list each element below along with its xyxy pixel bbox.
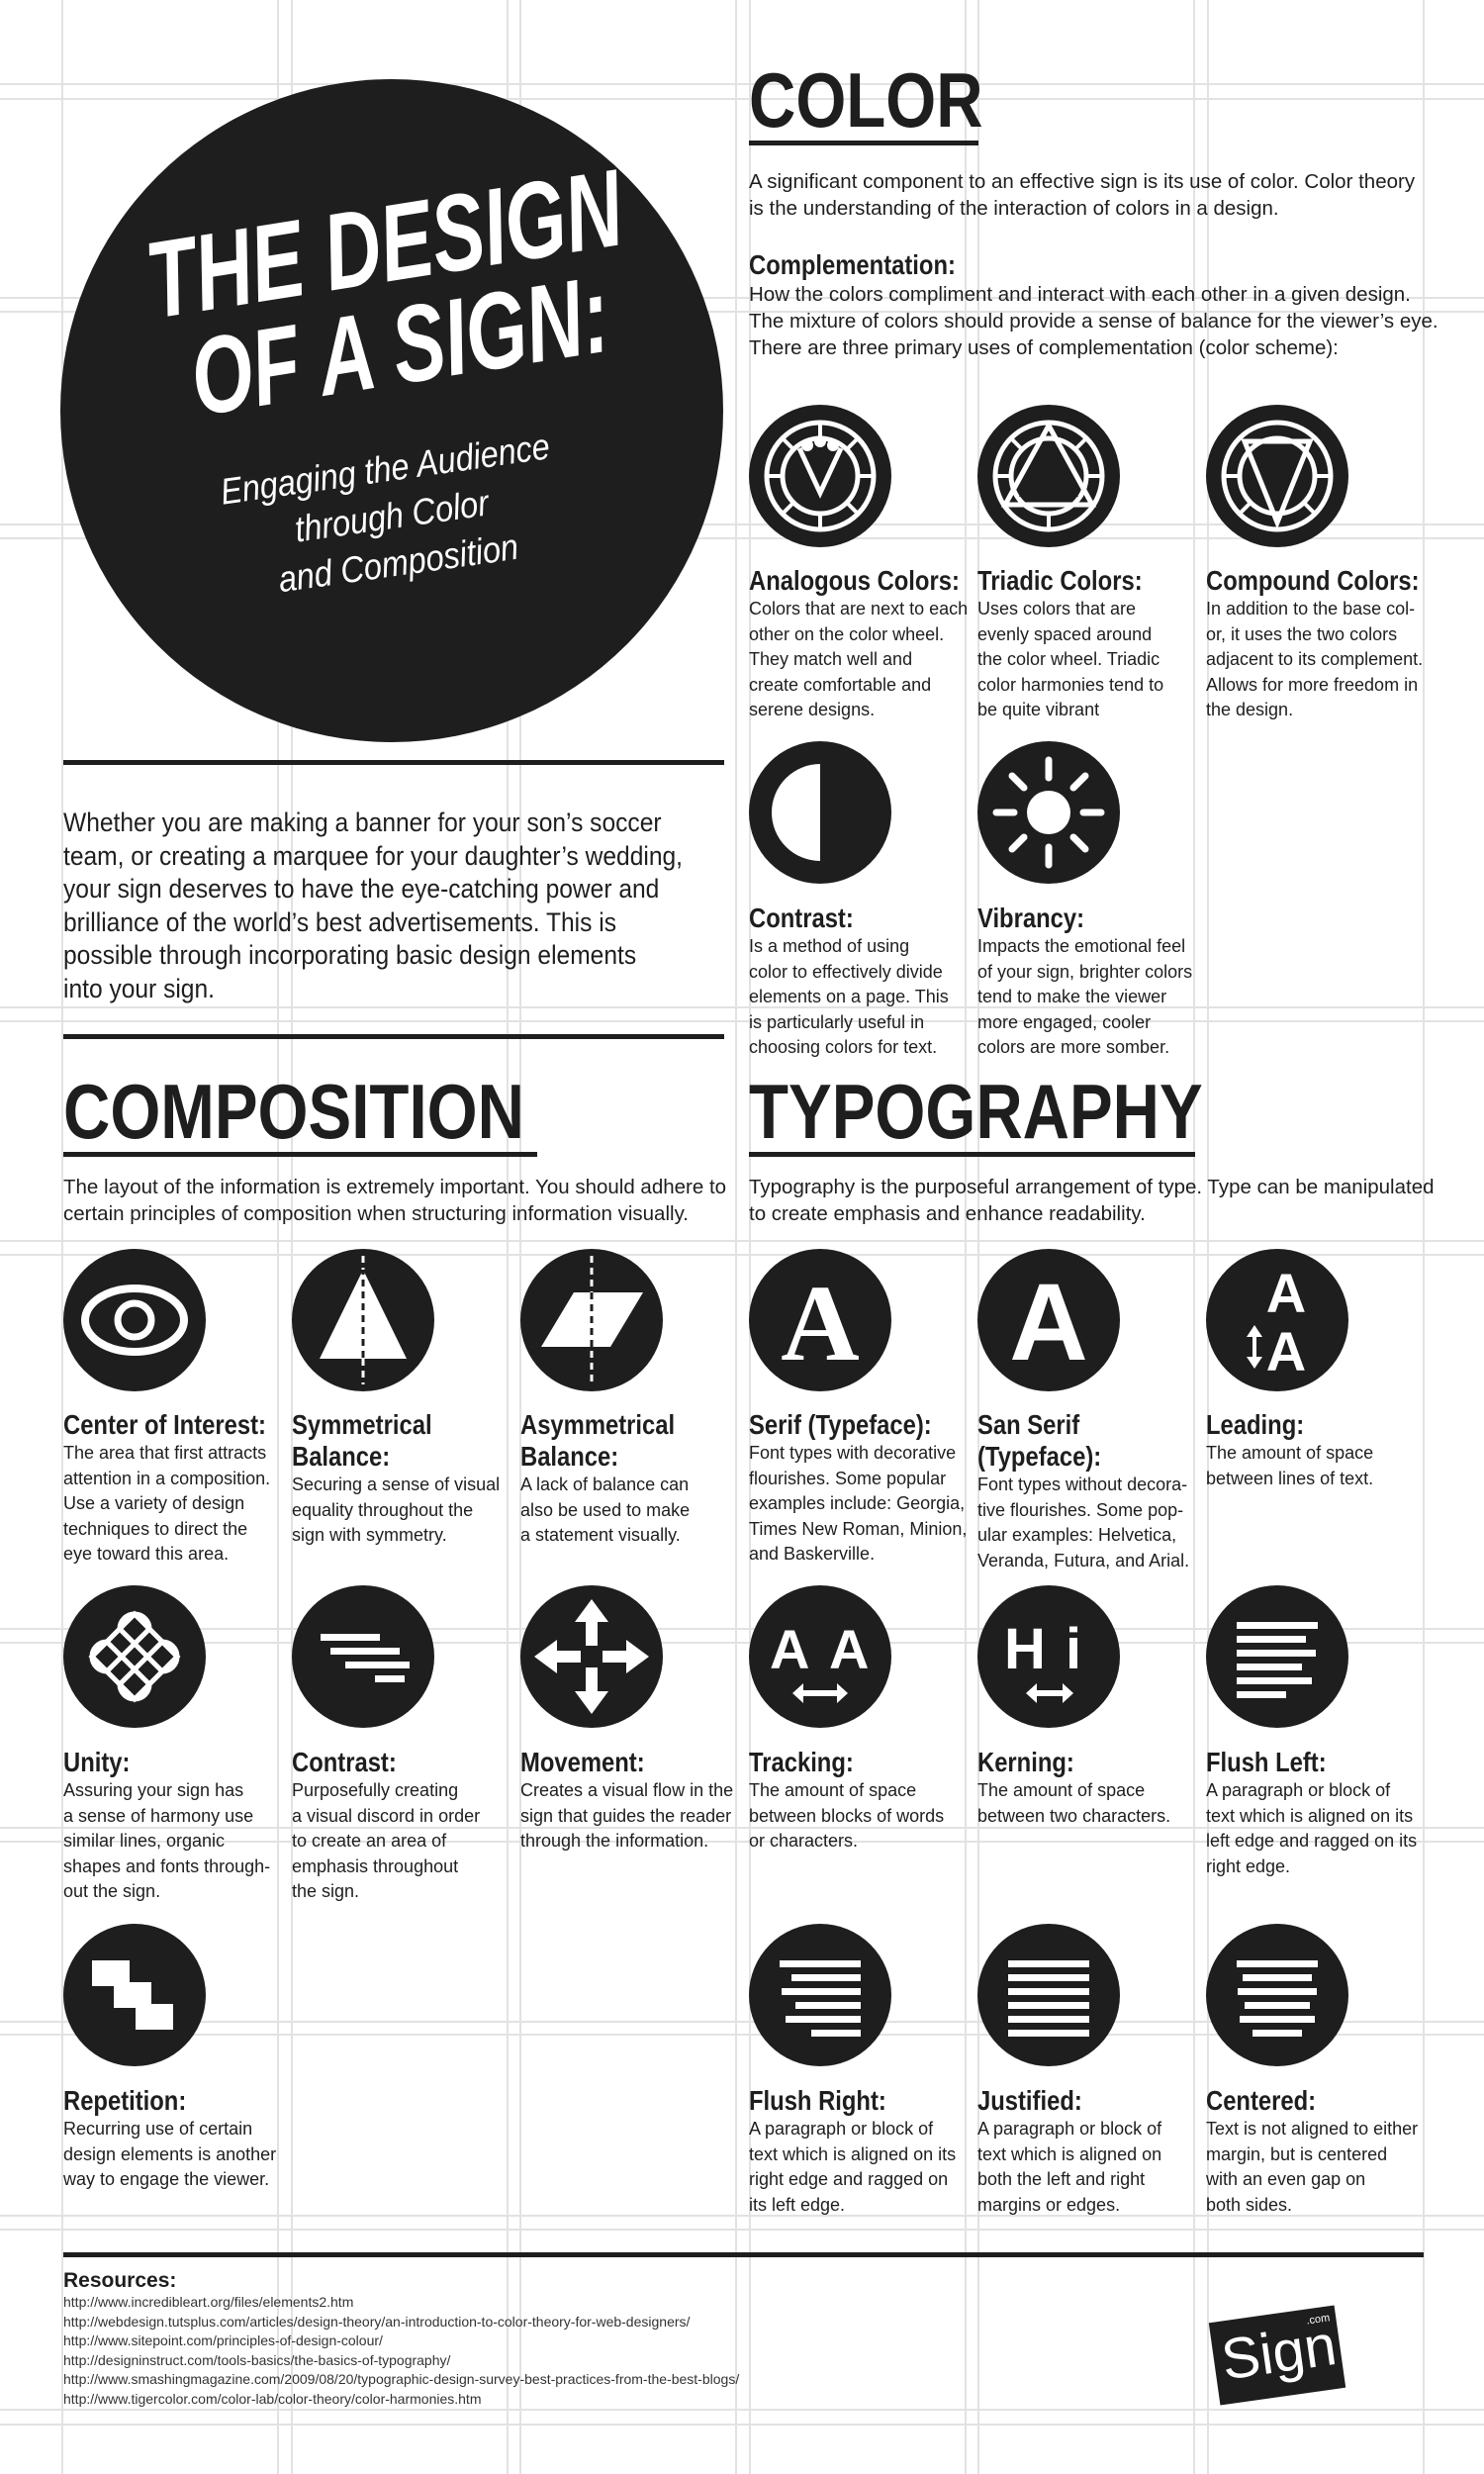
analogous text: create comfortable and — [749, 675, 931, 695]
icon: flush right — [748, 1923, 892, 2067]
subtitle — [218, 426, 552, 600]
icon: tracking: A — [829, 1618, 869, 1680]
flush right text: Flush Right: — [749, 2085, 886, 2116]
flush right text — [749, 2085, 956, 2218]
serif text: Times New Roman, Minion, — [749, 1518, 967, 1538]
contrast text: choosing colors for text. — [749, 1037, 937, 1057]
repetition text: Recurring use of certain — [63, 2119, 252, 2139]
analogous text: serene designs. — [749, 700, 875, 719]
unity text: a sense of harmony use — [63, 1805, 253, 1825]
centered text: Text is not aligned to either — [1206, 2119, 1418, 2139]
complementation: Complementation: — [749, 249, 956, 280]
vibrancy text: Vibrancy: — [977, 903, 1084, 933]
main title — [139, 146, 630, 439]
serif text: Font types with decorative — [749, 1443, 956, 1463]
sans serif text: (Typeface): — [977, 1441, 1101, 1472]
triadic text: the color wheel. Triadic — [977, 649, 1159, 669]
icon: vibrancy — [977, 741, 1120, 884]
justified text: Justified: — [977, 2085, 1082, 2116]
contrast text: is particularly useful in — [749, 1011, 924, 1031]
justified text: margins or edges. — [977, 2195, 1120, 2215]
centered text: Centered: — [1206, 2085, 1316, 2116]
intro paragraph: possible through incorporating basic design elements — [63, 940, 636, 970]
intro paragraph: Whether you are making a banner for your son’s soccer — [63, 808, 662, 837]
kerning text: Kerning: — [977, 1747, 1074, 1777]
title circle — [60, 79, 723, 742]
intro paragraph: into your sign. — [63, 974, 215, 1003]
heading: COMPOSITION: COMPOSITION — [63, 1068, 524, 1155]
icon: triadic — [977, 405, 1120, 547]
intro paragraph — [63, 760, 724, 1039]
leading text — [1206, 1409, 1373, 1488]
justified text: text which is aligned on — [977, 2143, 1161, 2163]
flush left text: right edge. — [1206, 1856, 1290, 1876]
tracking text: between blocks of words — [749, 1805, 944, 1825]
flush left text: Flush Left: — [1206, 1747, 1327, 1777]
tracking text: The amount of space — [749, 1780, 916, 1800]
composition intro: The layout of the information is extremely important. You should adhere to — [63, 1176, 726, 1198]
repetition text: Repetition: — [63, 2085, 186, 2116]
unity text: Assuring your sign has — [63, 1780, 243, 1800]
compound text: Compound Colors: — [1206, 565, 1420, 596]
resources: http://www.smashingmagazine.com/2009/08/20/typographic-design-survey-best-practices-from-the-best-blogs/ — [63, 2371, 739, 2387]
justified text — [977, 2085, 1161, 2218]
logo: Sign.com: Sign — [1218, 2313, 1341, 2393]
contrast text: Is a method of using — [749, 936, 909, 956]
tracking text: Tracking: — [749, 1747, 854, 1777]
icon: unity — [63, 1585, 206, 1728]
contrast comp text: Purposefully creating — [292, 1780, 458, 1800]
color intro: is the understanding of the interaction of colors in a design. — [749, 197, 1279, 220]
compound text — [1206, 565, 1423, 719]
flush left text: text which is aligned on its — [1206, 1805, 1413, 1825]
serif text: examples include: Georgia, — [749, 1493, 965, 1513]
compound text: the design. — [1206, 700, 1293, 719]
vibrancy text: tend to make the viewer — [977, 987, 1166, 1006]
tracking text — [749, 1747, 944, 1851]
icon: asymmetrical — [520, 1249, 663, 1391]
symmetrical text — [292, 1409, 500, 1545]
asymmetrical text: Asymmetrical — [520, 1409, 675, 1440]
icon: sans serif — [977, 1249, 1120, 1391]
serif text: Serif (Typeface): — [749, 1409, 932, 1440]
main title: THE DESIGN — [139, 146, 630, 342]
icon: justified — [976, 1923, 1121, 2067]
unity text: Unity: — [63, 1747, 130, 1777]
icon: compound — [1206, 405, 1348, 547]
icon: leading — [1206, 1249, 1348, 1391]
movement text: Movement: — [520, 1747, 645, 1777]
flush right text: A paragraph or block of — [749, 2119, 933, 2139]
icon: serif — [749, 1249, 891, 1391]
center of interest text: Use a variety of design — [63, 1493, 244, 1513]
justified text: A paragraph or block of — [977, 2119, 1161, 2139]
symmetrical text: Symmetrical — [292, 1409, 432, 1440]
center of interest text: eye toward this area. — [63, 1544, 229, 1564]
sans serif text — [977, 1409, 1189, 1570]
icon: movement — [520, 1585, 663, 1728]
centered text: both sides. — [1206, 2195, 1292, 2215]
asymmetrical text: a statement visually. — [520, 1525, 681, 1545]
justified text: both the left and right — [977, 2169, 1145, 2189]
intro paragraph: brilliance of the world’s best advertisements. This is — [63, 906, 616, 936]
complementation — [749, 249, 1438, 359]
asymmetrical text — [520, 1409, 690, 1545]
contrast comp text: emphasis throughout — [292, 1856, 458, 1876]
icon: flush left — [1206, 1585, 1348, 1728]
kerning text: between two characters. — [977, 1805, 1170, 1825]
sans serif text: Font types without decora- — [977, 1475, 1187, 1494]
analogous text: Analogous Colors: — [749, 565, 960, 596]
intro paragraph: your sign deserves to have the eye-catching power and — [63, 874, 659, 904]
icon: centered — [1205, 1923, 1349, 2067]
centered text: with an even gap on — [1206, 2169, 1365, 2189]
color intro — [749, 170, 1415, 220]
icon: analogous — [749, 405, 891, 547]
serif text: and Baskerville. — [749, 1544, 875, 1564]
color intro: A significant component to an effective sign is its use of color. Color theory — [749, 170, 1415, 193]
composition intro: certain principles of composition when structuring information visually. — [63, 1202, 689, 1225]
movement text — [520, 1747, 733, 1851]
icon: contrast — [749, 741, 891, 884]
kerning text — [977, 1747, 1170, 1825]
complementation: The mixture of colors should provide a sense of balance for the viewer’s eye. — [749, 310, 1438, 333]
contrast comp text — [292, 1747, 480, 1901]
resources: http://www.tigercolor.com/color-lab/color-theory/color-harmonies.htm — [63, 2391, 481, 2407]
flush right text: text which is aligned on its — [749, 2143, 956, 2163]
heading: COLOR: COLOR — [749, 56, 983, 143]
contrast comp text: Contrast: — [292, 1747, 397, 1777]
compound text: adjacent to its complement. — [1206, 649, 1423, 669]
leading text: The amount of space — [1206, 1443, 1373, 1463]
serif text: flourishes. Some popular — [749, 1469, 946, 1488]
centered text — [1206, 2085, 1418, 2218]
center of interest text: Center of Interest: — [63, 1409, 266, 1440]
sans serif text: San Serif — [977, 1409, 1079, 1440]
contrast text: elements on a page. This — [749, 987, 949, 1006]
icon: kerning: H — [1004, 1617, 1046, 1681]
symmetrical text: equality throughout the — [292, 1500, 473, 1520]
icon: kerning: i — [1066, 1617, 1081, 1681]
composition intro — [63, 1176, 726, 1225]
repetition text: design elements is another — [63, 2143, 276, 2163]
repetition text — [63, 2085, 276, 2193]
icon: tracking — [749, 1585, 891, 1728]
analogous text: Colors that are next to each — [749, 599, 968, 618]
unity text: similar lines, organic — [63, 1831, 225, 1851]
flush right text: right edge and ragged on — [749, 2169, 948, 2189]
sans serif text: tive flourishes. Some pop- — [977, 1500, 1183, 1520]
contrast text: Contrast: — [749, 903, 854, 933]
main title: OF A SIGN: — [182, 253, 617, 439]
vibrancy text — [977, 903, 1192, 1057]
flush left text — [1206, 1747, 1417, 1876]
resources: http://webdesign.tutsplus.com/articles/design-theory/an-introduction-to-color-theory-for-web-designers/ — [63, 2314, 690, 2330]
sans serif text: Veranda, Futura, and Arial. — [977, 1550, 1189, 1570]
movement text: through the information. — [520, 1831, 708, 1851]
complementation: There are three primary uses of complementation (color scheme): — [749, 336, 1339, 359]
compound text: Allows for more freedom in — [1206, 675, 1418, 695]
compound text: or, it uses the two colors — [1206, 623, 1397, 643]
unity text — [63, 1747, 270, 1901]
icon: leading: A — [1266, 1320, 1306, 1382]
asymmetrical text: A lack of balance can — [520, 1475, 689, 1494]
flush left text: left edge and ragged on its — [1206, 1831, 1417, 1851]
subtitle: through Color — [292, 482, 491, 550]
contrast text — [749, 903, 949, 1057]
triadic text: Triadic Colors: — [977, 565, 1143, 596]
center of interest text: The area that first attracts — [63, 1443, 266, 1463]
triadic text: be quite vibrant — [977, 700, 1099, 719]
contrast comp text: a visual discord in order — [292, 1805, 480, 1825]
vibrancy text: of your sign, brighter colors — [977, 962, 1192, 982]
compound text: In addition to the base col- — [1206, 599, 1415, 618]
resources: http://designinstruct.com/tools-basics/the-basics-of-typography/ — [63, 2351, 450, 2367]
icon: symmetrical — [292, 1249, 434, 1391]
heading: TYPOGRAPHY: TYPOGRAPHY — [749, 1068, 1203, 1155]
icon: sans serif: A — [1009, 1262, 1088, 1383]
contrast text: color to effectively divide — [749, 962, 943, 982]
vibrancy text: colors are more somber. — [977, 1037, 1169, 1057]
icon: serif: A — [781, 1263, 860, 1383]
subtitle: and Composition — [276, 526, 520, 600]
symmetrical text: sign with symmetry. — [292, 1525, 447, 1545]
icon: repetition — [62, 1923, 207, 2067]
typography intro: to create emphasis and enhance readability. — [749, 1202, 1146, 1225]
center of interest text — [63, 1409, 270, 1564]
typography intro: Typography is the purposeful arrangement of type. Type can be manipulated — [749, 1176, 1435, 1198]
intro paragraph: team, or creating a marquee for your daughter’s wedding, — [63, 841, 683, 871]
resources: Resources: — [63, 2269, 176, 2292]
symmetrical text: Securing a sense of visual — [292, 1475, 500, 1494]
center of interest text: attention in a composition. — [63, 1469, 270, 1488]
leading text: between lines of text. — [1206, 1469, 1373, 1488]
sans serif text: ular examples: Helvetica, — [977, 1525, 1176, 1545]
icon: contrast comp — [292, 1585, 434, 1728]
flush left text: A paragraph or block of — [1206, 1780, 1390, 1800]
tracking text: or characters. — [749, 1831, 858, 1851]
analogous text: other on the color wheel. — [749, 623, 944, 643]
analogous text — [749, 565, 968, 719]
movement text: Creates a visual flow in the — [520, 1780, 733, 1800]
triadic text: Uses colors that are — [977, 599, 1136, 618]
centered text: margin, but is centered — [1206, 2143, 1387, 2163]
asymmetrical text: also be used to make — [520, 1500, 690, 1520]
icon: center of interest — [63, 1249, 206, 1391]
triadic text: evenly spaced around — [977, 623, 1152, 643]
symmetrical text: Balance: — [292, 1441, 390, 1472]
resources: http://www.sitepoint.com/principles-of-design-colour/ — [63, 2332, 383, 2348]
triadic text: color harmonies tend to — [977, 675, 1163, 695]
center of interest text: techniques to direct the — [63, 1518, 247, 1538]
unity text: out the sign. — [63, 1881, 160, 1901]
serif text — [749, 1409, 967, 1564]
kerning text: The amount of space — [977, 1780, 1145, 1800]
triadic text — [977, 565, 1163, 719]
vibrancy text: Impacts the emotional feel — [977, 936, 1185, 956]
vibrancy text: more engaged, cooler — [977, 1011, 1151, 1031]
resources — [63, 2252, 1424, 2409]
subtitle: Engaging the Audience — [218, 426, 552, 513]
asymmetrical text: Balance: — [520, 1441, 618, 1472]
contrast comp text: the sign. — [292, 1881, 359, 1901]
logo: Sign.com: .com — [1306, 2312, 1331, 2328]
icon: leading: A — [1266, 1262, 1306, 1324]
leading text: Leading: — [1206, 1409, 1304, 1440]
icon: kerning — [977, 1585, 1120, 1728]
unity text: shapes and fonts through- — [63, 1856, 270, 1876]
resources: http://www.incredibleart.org/files/elements2.htm — [63, 2294, 353, 2310]
analogous text: They match well and — [749, 649, 912, 669]
movement text: sign that guides the reader — [520, 1805, 731, 1825]
contrast comp text: to create an area of — [292, 1831, 446, 1851]
complementation: How the colors compliment and interact with each other in a given design. — [749, 283, 1411, 306]
typography intro — [749, 1176, 1435, 1225]
flush right text: its left edge. — [749, 2195, 845, 2215]
icon: tracking: A — [770, 1618, 809, 1680]
repetition text: way to engage the viewer. — [63, 2169, 269, 2189]
